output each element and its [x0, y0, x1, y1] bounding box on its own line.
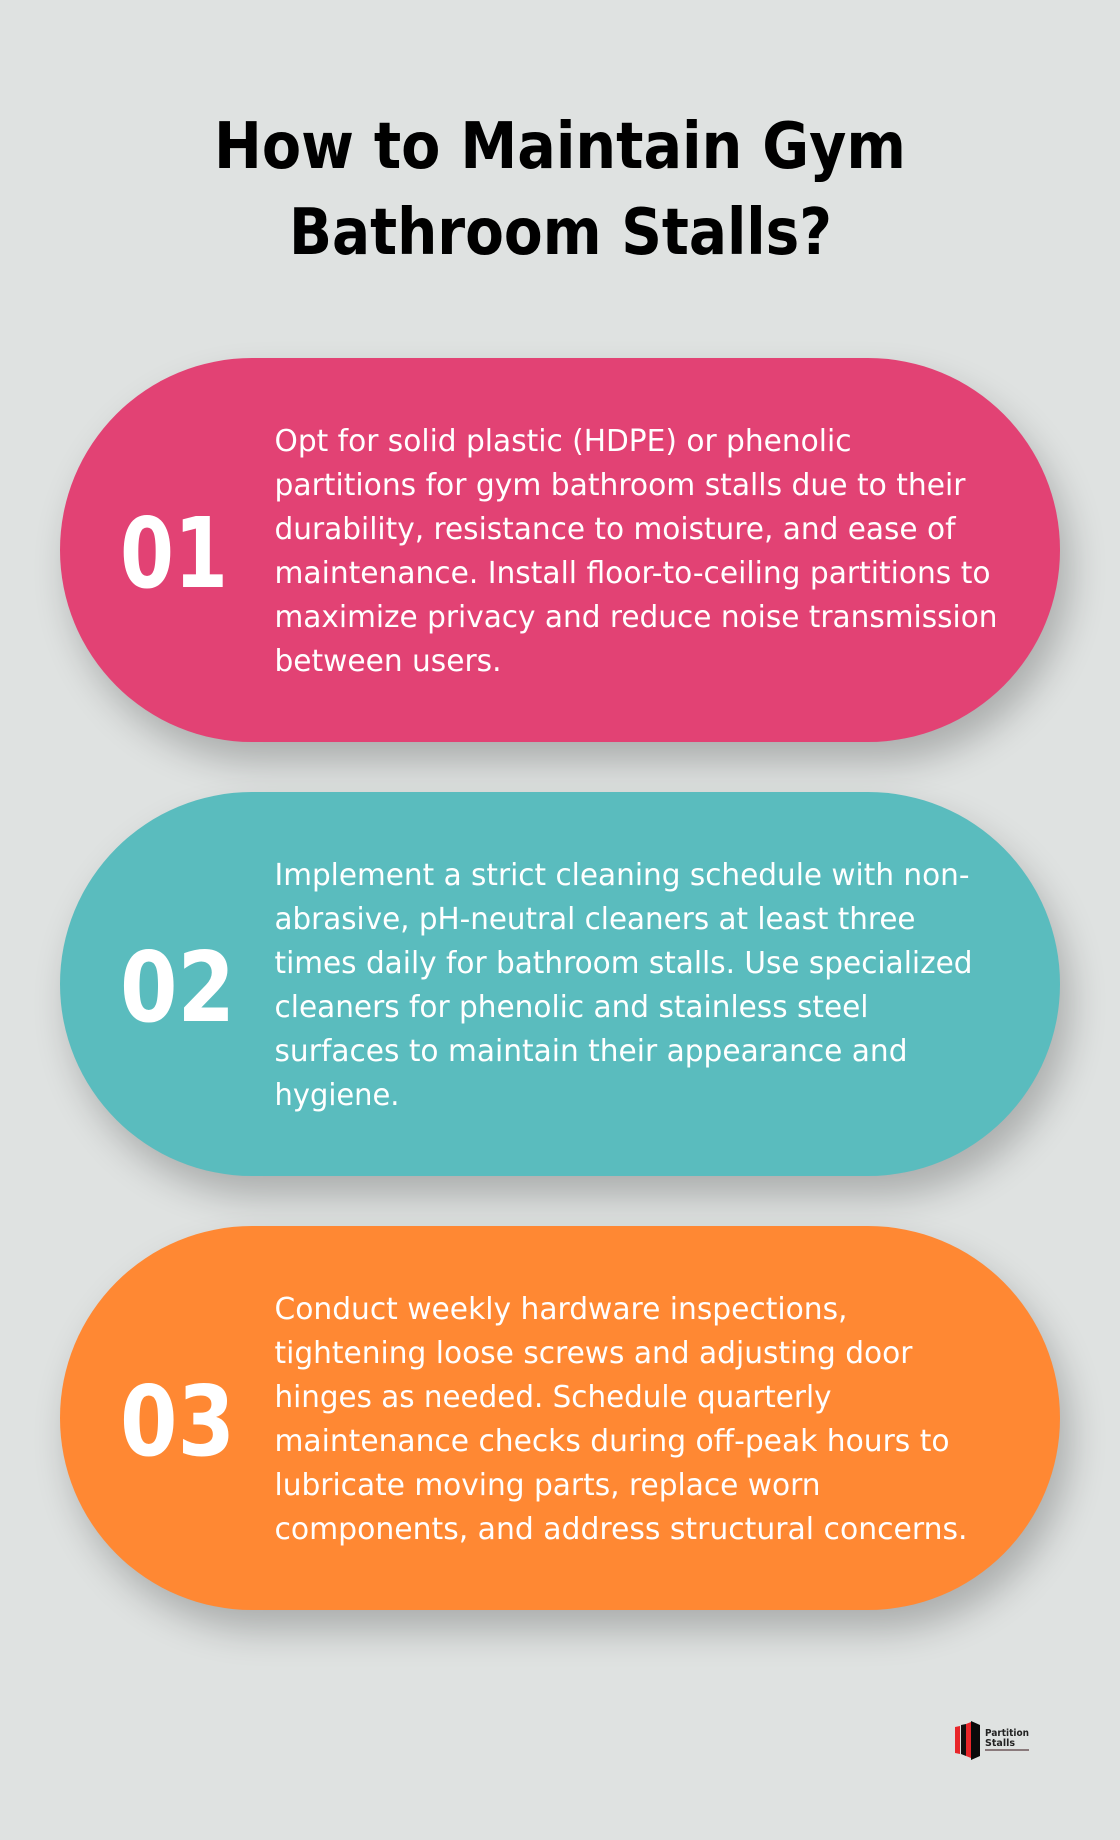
- panel: step 03: [60, 1226, 1060, 1610]
- step 03 description: tightening loose screws and adjusting door: [274, 1336, 913, 1371]
- step number 03: 03: [120, 1365, 235, 1478]
- logo: Partition Stalls: [955, 1721, 1029, 1760]
- step 03 description: Conduct weekly hardware inspections,: [274, 1292, 848, 1327]
- step 01 description: maintenance. Install floor-to-ceiling partitions to: [274, 556, 990, 591]
- step 03 description: [274, 1292, 968, 1547]
- step 03 description: lubricate moving parts, replace worn: [274, 1468, 820, 1503]
- step 03 description: hinges as needed. Schedule quarterly: [274, 1380, 832, 1415]
- title: How to Maintain Gym: [214, 110, 906, 184]
- step 01 description: maximize privacy and reduce noise transmission: [274, 600, 998, 635]
- step 02 description: [274, 858, 972, 1113]
- step 02 description: Implement a strict cleaning schedule with non-: [274, 858, 970, 893]
- step 03 description: maintenance checks during off-peak hours to: [274, 1424, 950, 1459]
- title: [214, 110, 906, 270]
- step 03 description: components, and address structural concerns.: [274, 1512, 968, 1547]
- step 01 description: between users.: [274, 644, 502, 679]
- step 01 description: Opt for solid plastic (HDPE) or phenolic: [274, 424, 852, 459]
- step number 02: 02: [120, 931, 235, 1044]
- step 02 description: surfaces to maintain their appearance and: [274, 1034, 908, 1069]
- panel: step 02: [60, 792, 1060, 1176]
- step 01 description: [274, 424, 998, 679]
- step 01 description: durability, resistance to moisture, and ease of: [274, 512, 957, 547]
- step number 01: 01: [120, 497, 228, 610]
- step 01 description: partitions for gym bathroom stalls due to their: [274, 468, 966, 503]
- step 02 description: times daily for bathroom stalls. Use specialized: [274, 946, 972, 981]
- step 02 description: hygiene.: [274, 1078, 400, 1113]
- step 02 description: cleaners for phenolic and stainless steel: [274, 990, 868, 1025]
- logo: Partition Stalls: Partition: [985, 1728, 1029, 1739]
- panel: step 01: [60, 358, 1060, 742]
- logo: Partition Stalls: Stalls: [985, 1738, 1015, 1749]
- step 02 description: abrasive, pH-neutral cleaners at least three: [274, 902, 916, 937]
- title: Bathroom Stalls?: [289, 196, 832, 270]
